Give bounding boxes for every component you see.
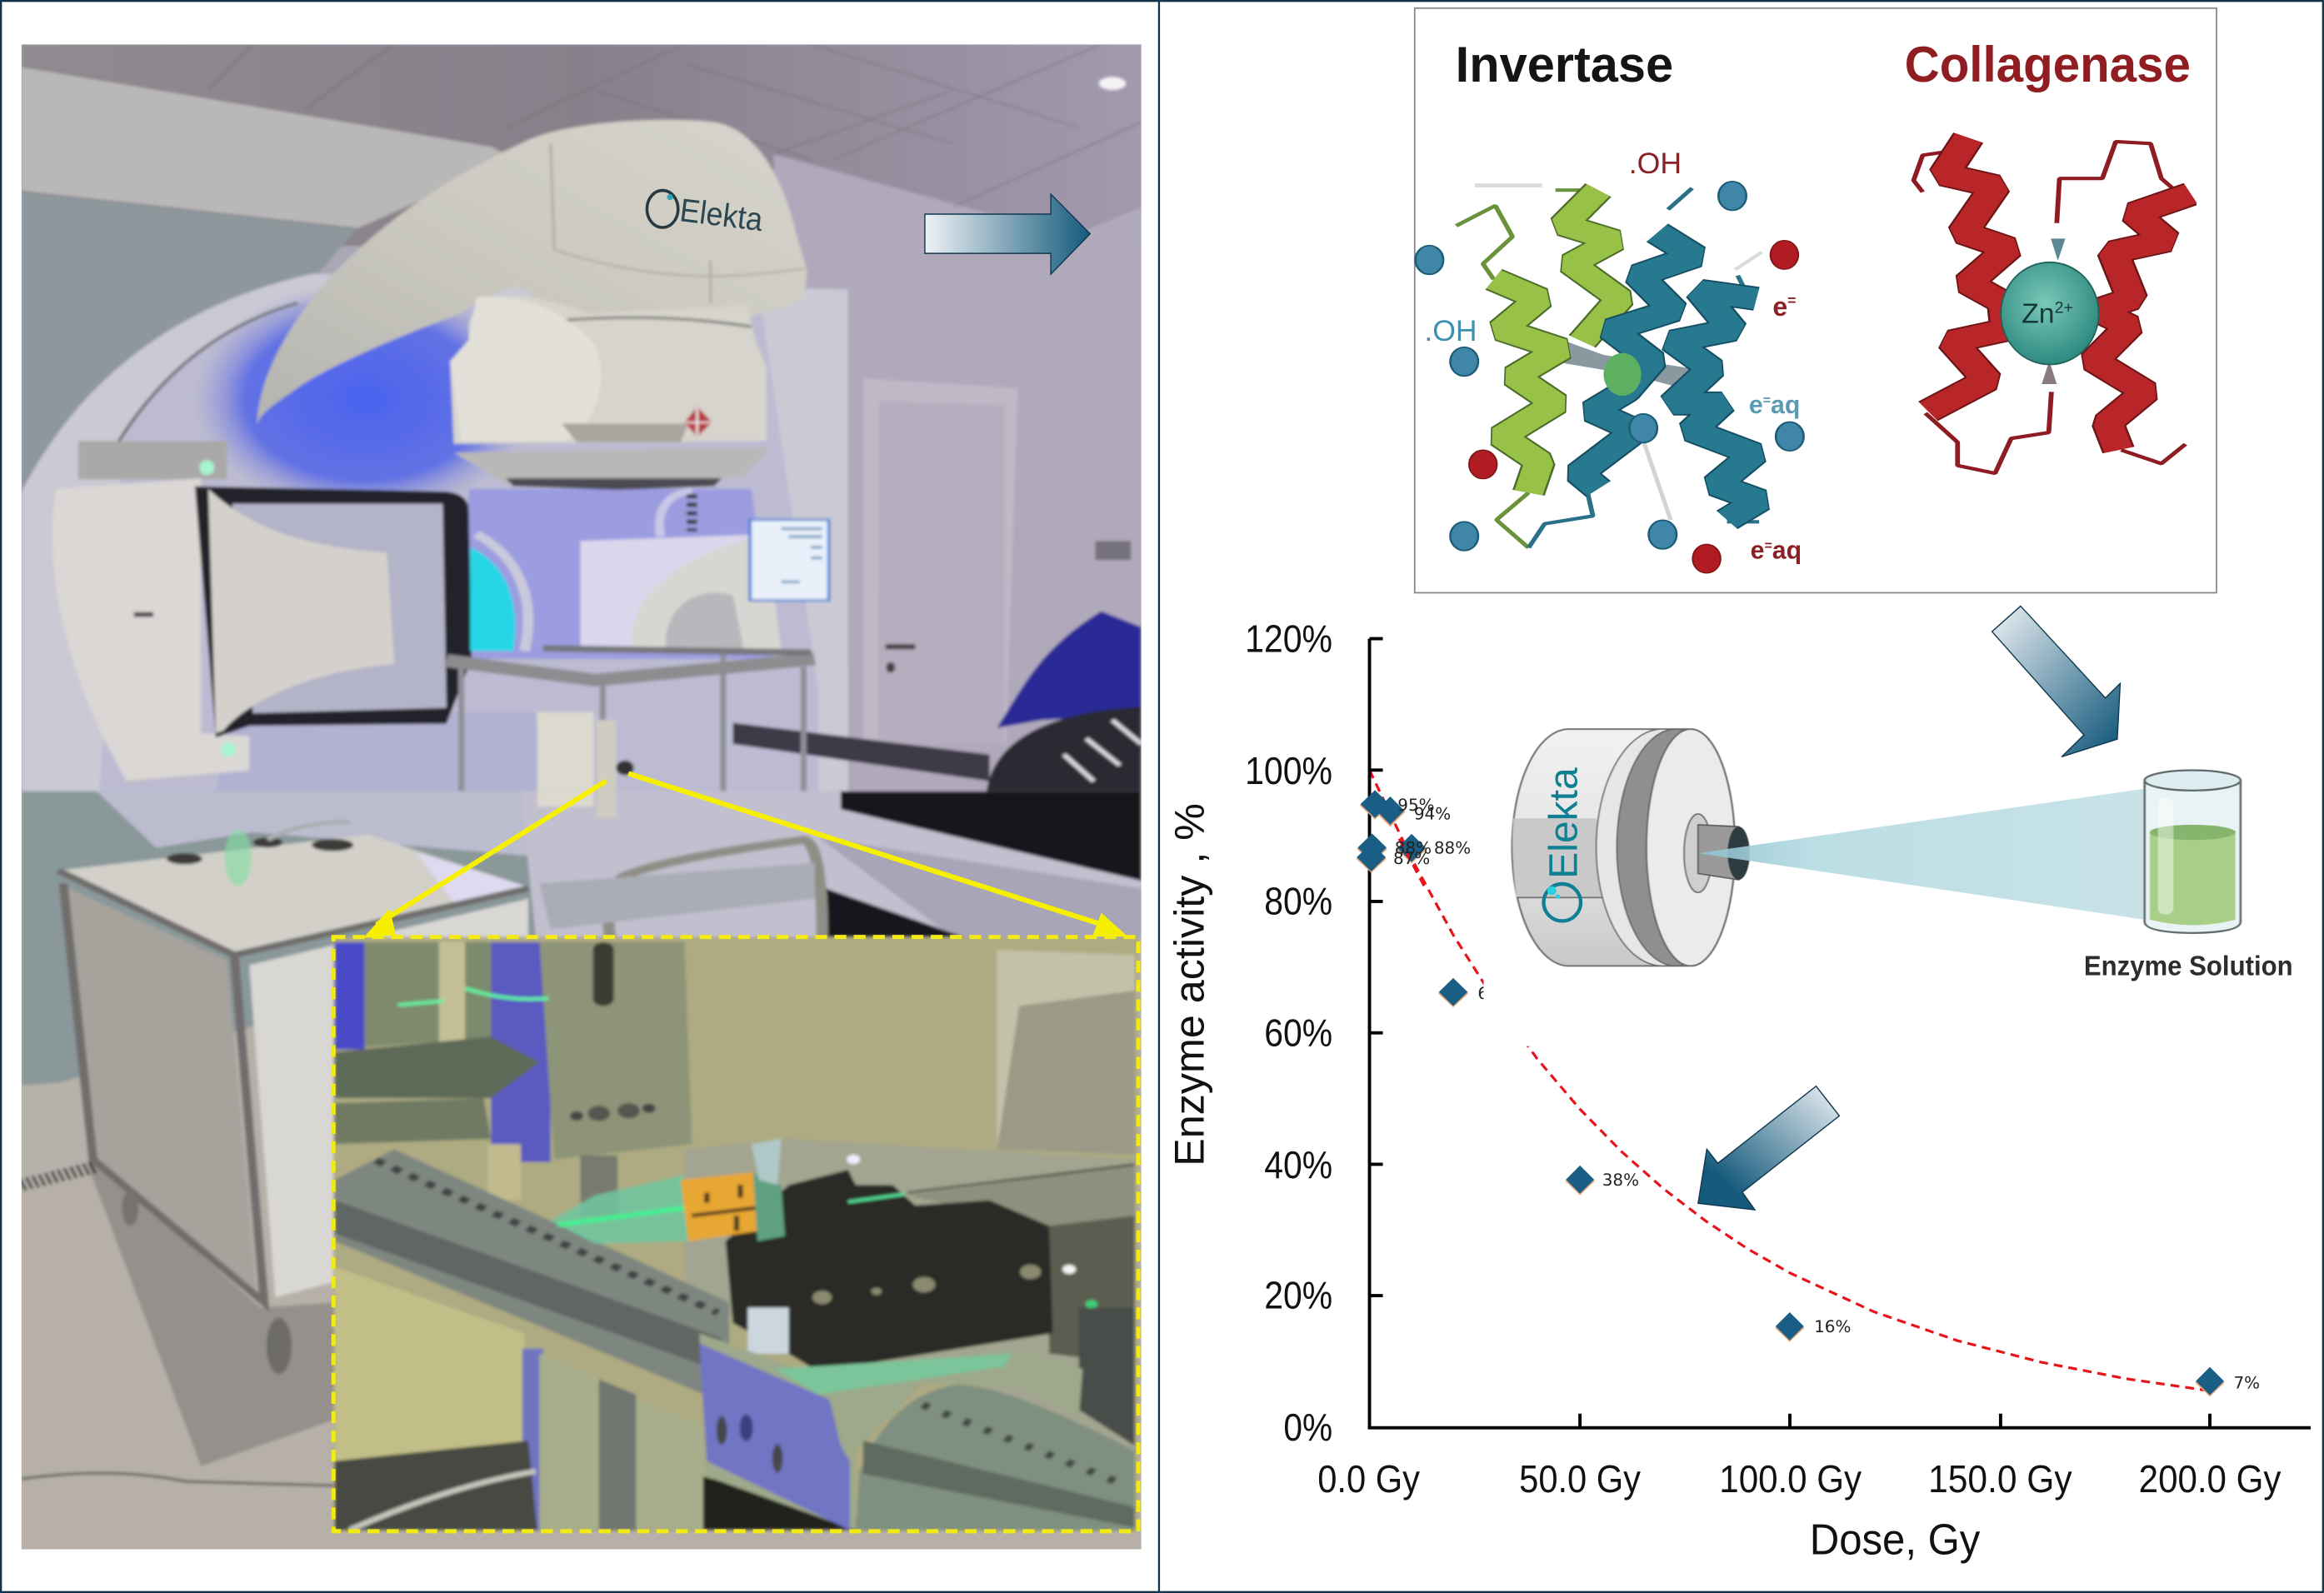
cabinet bbox=[63, 886, 257, 1295]
y axis tick labels: 20% bbox=[1264, 1274, 1332, 1317]
y axis tick labels: 60% bbox=[1264, 1011, 1332, 1055]
beaker caption: Enzyme Solution bbox=[2084, 950, 2293, 981]
species labels: = bbox=[1787, 292, 1796, 308]
species labels: aq bbox=[1772, 537, 1802, 565]
upper room scene: linac gantry bbox=[22, 44, 1142, 795]
arrow: left yellow pointer to inset bbox=[363, 781, 606, 938]
x axis title: Dose, Gy bbox=[1810, 1516, 1981, 1564]
y axis tick labels: 80% bbox=[1264, 879, 1332, 922]
stage mount bbox=[1079, 1308, 1135, 1446]
background glass table bbox=[684, 1139, 1135, 1456]
arrow: blue arrow to enzyme panel bbox=[925, 194, 1090, 274]
species labels: = bbox=[1763, 394, 1771, 408]
zinc ion: Zn bbox=[2022, 298, 2055, 330]
data markers bbox=[1357, 790, 2225, 1396]
species labels: e bbox=[1772, 292, 1787, 322]
panel: treatment room photo bbox=[0, 0, 1167, 1558]
inset dashed border bbox=[333, 937, 1138, 1531]
arrow: from irradiation to chart bbox=[1698, 1086, 1839, 1210]
arrow: right yellow pointer to inset bbox=[628, 773, 1128, 936]
data labels: 16% bbox=[1814, 1317, 1851, 1336]
x axis tick labels: 200.0 Gy bbox=[2139, 1457, 2282, 1501]
collagenase helices bbox=[1913, 137, 2191, 473]
kV source and monitor bbox=[578, 533, 750, 648]
radiation beam bbox=[1698, 789, 2145, 920]
panel: beam irradiation schematic bbox=[1483, 606, 2314, 1210]
y axis tick labels bbox=[1245, 617, 1332, 1449]
data labels: 66% bbox=[1477, 984, 1515, 1003]
x axis tick labels bbox=[1317, 1457, 2282, 1501]
y axis tick labels: 0% bbox=[1283, 1406, 1332, 1449]
x axis tick labels: 0.0 Gy bbox=[1317, 1457, 1421, 1501]
zinc ion bbox=[2001, 262, 2099, 365]
trend line bbox=[1370, 770, 2210, 1391]
cyan bore bbox=[470, 547, 515, 651]
species labels: .OH bbox=[1424, 314, 1477, 347]
species labels: .OH bbox=[1629, 147, 1682, 180]
axes bbox=[1370, 639, 2311, 1428]
power cable bbox=[22, 1473, 333, 1486]
gantry ring bbox=[22, 273, 848, 833]
x axis tick labels: 50.0 Gy bbox=[1519, 1457, 1642, 1501]
beaker of enzyme solution bbox=[2145, 770, 2241, 933]
data labels bbox=[1393, 796, 2260, 1393]
data labels: 95% bbox=[1397, 796, 1435, 815]
ion chamber block bbox=[726, 1170, 1052, 1371]
heading: Collagenase: Collagenase bbox=[1905, 36, 2191, 92]
door bbox=[863, 378, 1017, 744]
chart: enzyme activity vs dose bbox=[1166, 617, 2311, 1564]
data labels: 88% bbox=[1434, 838, 1471, 857]
zinc ion: 2+ bbox=[2055, 298, 2073, 317]
logo on gantry head: Elekta bbox=[678, 192, 765, 238]
y axis title: Enzyme activity , % bbox=[1166, 803, 1212, 1166]
data labels: 38% bbox=[1602, 1171, 1639, 1190]
linac cylinder bbox=[1512, 729, 1750, 966]
vial bbox=[551, 1175, 688, 1244]
gantry arm bbox=[257, 120, 807, 425]
wall recess bbox=[744, 284, 850, 664]
x axis tick labels: 100.0 Gy bbox=[1719, 1457, 1862, 1501]
perforated rail bbox=[335, 1149, 729, 1405]
y axis tick labels: 100% bbox=[1245, 749, 1332, 792]
y axis tick labels: 40% bbox=[1264, 1143, 1332, 1186]
data labels: 88% bbox=[1395, 838, 1432, 857]
lower room scene: phantom cabinet and floor bbox=[0, 792, 1167, 1558]
species labels: aq bbox=[1771, 392, 1800, 419]
species labels bbox=[1424, 147, 1802, 565]
treatment head bbox=[450, 297, 767, 444]
invertase helices bbox=[1416, 182, 1804, 573]
species labels: e bbox=[1751, 537, 1764, 565]
inset photo: mounted vial on stage bbox=[333, 937, 1138, 1531]
data labels: 7% bbox=[2233, 1374, 2260, 1393]
data labels: 94% bbox=[1414, 805, 1451, 824]
kV imager bbox=[78, 441, 227, 479]
heading: Invertase: Invertase bbox=[1456, 36, 1673, 92]
species labels: e bbox=[1749, 392, 1763, 419]
couch table and patient immobiliser bbox=[997, 611, 1142, 728]
rotated Elekta logo: Elekta bbox=[1542, 767, 1587, 879]
irradiation frame bbox=[456, 652, 808, 793]
y axis tick labels: 120% bbox=[1245, 617, 1332, 661]
species labels: = bbox=[1764, 539, 1772, 553]
logo on gantry head bbox=[647, 191, 765, 238]
x axis tick labels: 150.0 Gy bbox=[1928, 1457, 2072, 1501]
arrow: from enzymes to irradiation bbox=[1992, 606, 2120, 757]
data labels: 87% bbox=[1393, 849, 1430, 868]
panel: enzyme structures bbox=[1415, 8, 2217, 592]
